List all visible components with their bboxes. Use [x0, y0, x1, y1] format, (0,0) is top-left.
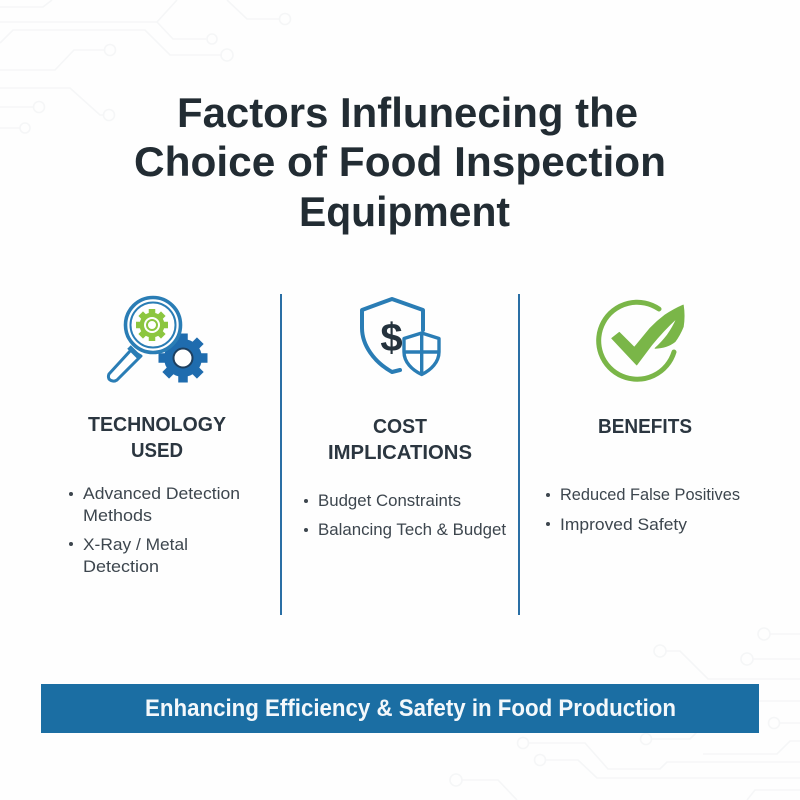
heading: benefits: BENEFITS [598, 416, 692, 438]
bullet list: technology [69, 485, 240, 576]
heading: cost implications: IMPLICATIONS [328, 442, 472, 464]
bullet list: benefits [546, 486, 740, 534]
panel: benefits [546, 302, 740, 534]
panel: technology used [69, 298, 240, 576]
bullet list: technology: Advanced Detection [83, 485, 240, 503]
bullet list: cost: Balancing Tech & Budget [318, 521, 506, 539]
bullet list: technology: Methods [83, 507, 152, 525]
heading: cost implications: COST [373, 416, 427, 438]
heading: technology used [88, 414, 227, 462]
bullet list: technology: Detection [83, 558, 159, 576]
heading: technology used: USED [131, 440, 183, 462]
bullet list: benefits: Improved Safety [560, 516, 688, 534]
heading: cost implications [328, 416, 472, 464]
banner: Enhancing Efficiency & Safety in Food Production [145, 695, 676, 722]
bullet list: benefits: Reduced False Positives [560, 486, 740, 504]
icon: check with leaf [599, 302, 684, 379]
title [134, 89, 666, 235]
bullet list: cost: Budget Constraints [318, 492, 461, 510]
bullet list: technology: X-Ray / Metal [83, 536, 188, 554]
banner [41, 684, 759, 733]
icon: dollar shield [362, 299, 439, 374]
icon: magnifier with gears [108, 298, 208, 382]
title: Choice of Food Inspection [134, 138, 666, 185]
bullet list: cost [304, 492, 506, 539]
title: Factors Influnecing the [177, 89, 638, 136]
panel: cost implications [304, 299, 506, 539]
title: Equipment [299, 188, 510, 235]
heading: technology used: TECHNOLOGY [88, 414, 227, 436]
icon: dollar shield: $ [380, 316, 403, 360]
